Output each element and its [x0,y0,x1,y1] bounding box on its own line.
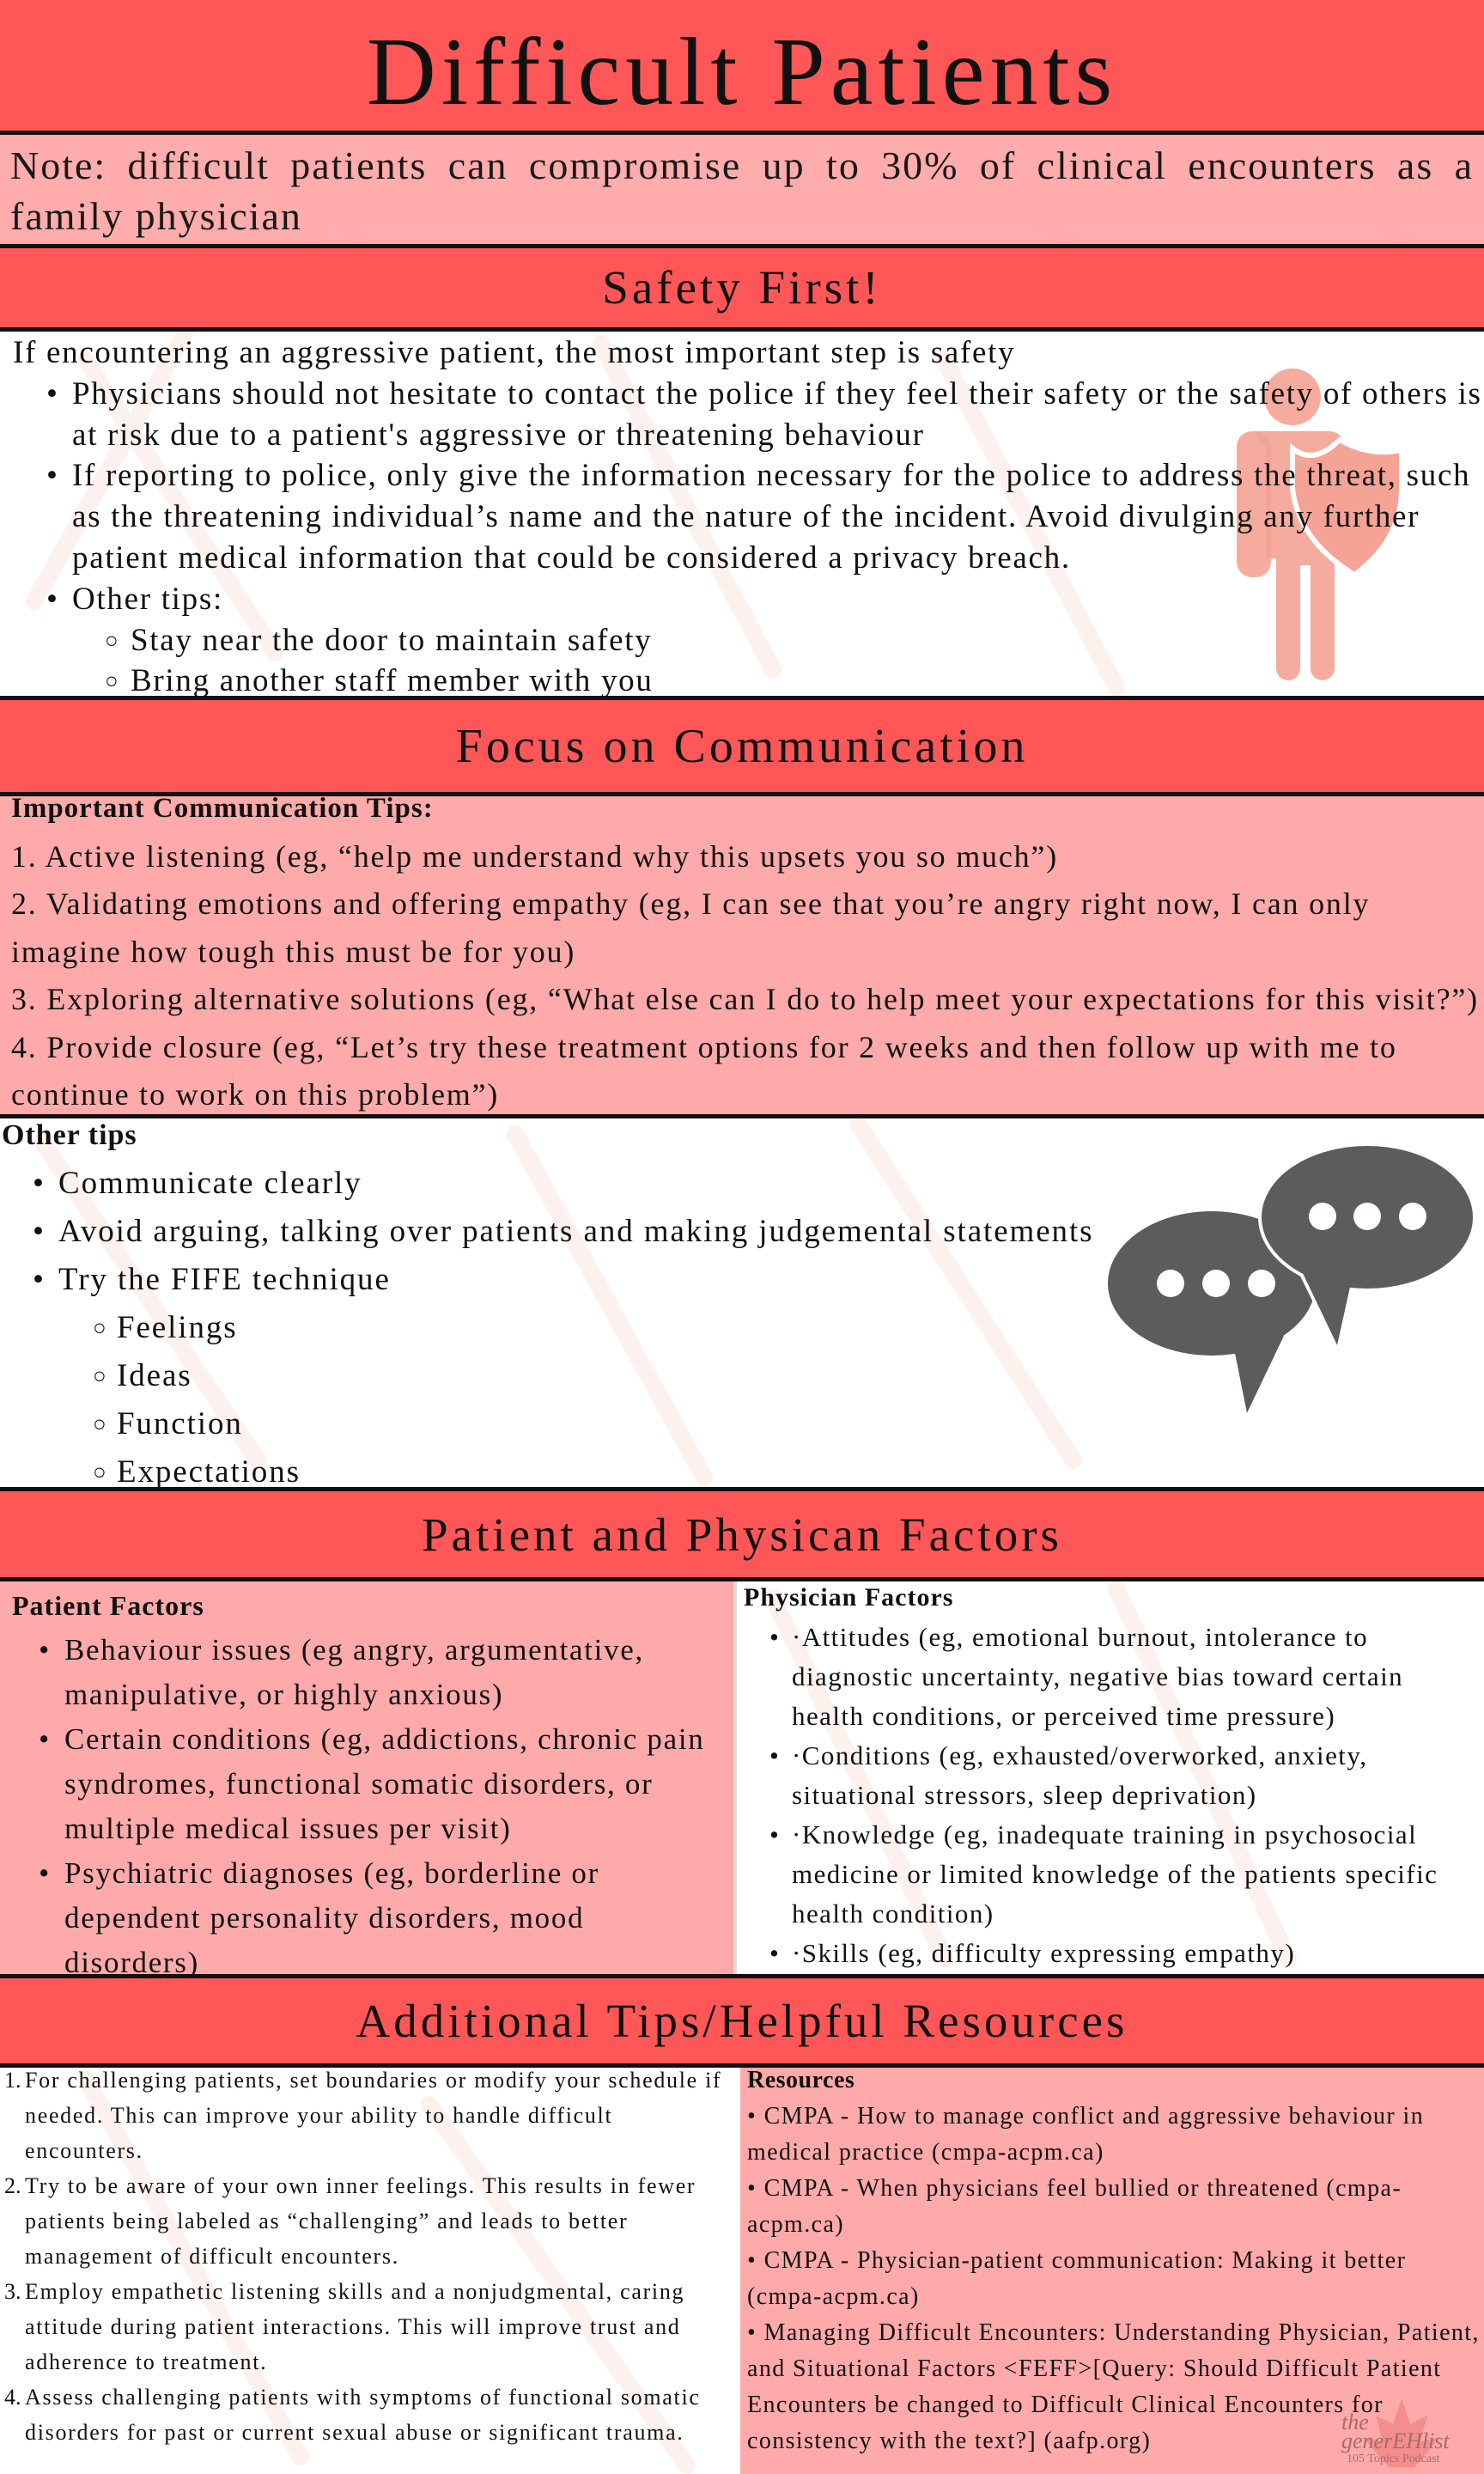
panel: patient factors: • [39,1722,51,1756]
other tips: • [33,1262,46,1297]
panel: additional tips list: Try to be aware of your own inner feelings. This results in fewer [25,2173,696,2198]
header: patient and physician factors: Patient and Physican Factors [422,1508,1062,1561]
title band [0,0,1484,132]
panel: additional tips list: adherence to treatment. [25,2349,267,2374]
panel: patient factors: Behaviour issues (eg angry, argumentative, [64,1633,644,1667]
other tips: Ideas [117,1358,192,1393]
panel: patient factors: dependent personality disorders, mood [64,1901,584,1935]
title: Difficult Patients [367,19,1117,125]
other tips: Communicate clearly [58,1166,362,1201]
panel: physician factors: ·Knowledge (eg, inadequate training in psychosocial [792,1819,1417,1849]
panel: resources [740,2068,1484,2474]
other tips [2,1119,1093,1490]
panel: physician factors [744,1583,1438,1968]
panel: patient factors: Patient Factors [12,1590,204,1621]
note text: family physician [10,194,302,238]
panel: additional tips list: For challenging patients, set boundaries or modify your schedule if [25,2068,721,2093]
note text: Note: difficult patients can compromise up to 30% of clinical encounters as a [10,143,1474,187]
panel: additional tips list [4,2068,721,2445]
safety content: Other tips: [72,582,223,617]
communication tips panel: continue to work on this problem”) [11,1077,499,1112]
panel: physician factors: ·Skills (eg, difficulty expressing empathy) [792,1938,1295,1968]
safety content: • [46,458,59,493]
other tips: • [33,1166,46,1201]
note text [10,143,1474,238]
panel: additional tips list: attitude during patient interactions. This will improve trust and [25,2314,681,2339]
panel: additional tips list: disorders for past or current sexual abuse or significant trauma. [25,2420,684,2445]
safety content: at risk due to a patient's aggressive or threatening behaviour [72,417,925,453]
safety content: Stay near the door to maintain safety [131,623,652,658]
panel: resources: • CMPA - When physicians feel bullied or threatened (cmpa- [747,2175,1402,2202]
other tips: Avoid arguing, talking over patients and making judgemental statements [58,1214,1093,1249]
panel: patient factors: disorders) [64,1946,199,1979]
panel: resources: Encounters be changed to Difficult Clinical Encounters for [747,2392,1384,2418]
panel: resources: and Situational Factors <FEFF>[Query: Should Difficult Patient [747,2355,1441,2382]
header: focus on communication: Focus on Communication [456,720,1028,773]
safety content: • [46,376,59,411]
panel: additional tips list: 2. [4,2173,21,2198]
panel: patient factors: manipulative, or highly anxious) [64,1678,503,1711]
panel: additional tips list: management of difficult encounters. [25,2244,399,2269]
other tips: • [33,1214,46,1249]
safety content: as the threatening individual’s name and the nature of the incident. Avoid divulging any further [72,499,1420,534]
panel: additional tips list: 3. [4,2279,21,2304]
communication tips panel: imagine how tough this must be for you) [11,935,575,969]
panel: physician factors: ·Conditions (eg, exhausted/overworked, anxiety, [792,1740,1367,1770]
header: patient and physician factors [0,1491,1484,1578]
icon: person with shield [1237,369,1399,680]
panel: additional tips list: Employ empathetic listening skills and a nonjudgmental, caring [25,2279,684,2304]
safety content: If reporting to police, only give the information necessary for the police to address the threat, such [72,458,1470,493]
icon: speech bubbles [1108,1146,1473,1413]
panel: resources: • CMPA - Physician-patient communication: Making it better [747,2247,1406,2274]
communication tips panel: 4. Provide closure (eg, “Let’s try these treatment options for 2 weeks and then follow up with me to [11,1029,1397,1063]
panel: physician factors: health conditions, or perceived time pressure) [792,1701,1335,1731]
panel: patient factors: • [39,1856,51,1890]
other tips: ○ [93,1315,108,1340]
communication tips panel: 1. Active listening (eg, “help me understand why this upsets you so much”) [11,838,1058,873]
communication tips panel: Important Communication Tips: [11,793,434,824]
panel: physician factors: • [769,1622,780,1652]
panel: patient factors: multiple medical issues per visit) [64,1812,512,1845]
panel: resources: • CMPA - How to manage conflict and aggressive behaviour in [747,2103,1424,2130]
other tips: ○ [93,1411,108,1436]
panel: additional tips list: 4. [4,2385,21,2410]
header: additional tips [0,1978,1484,2064]
logo: the generEHlist [1341,2398,1450,2467]
header: safety first: Safety First! [602,261,882,314]
safety content [13,335,1482,698]
other tips: ○ [93,1363,108,1388]
panel: additional tips list: patients being labeled as “challenging” and leads to better [25,2209,628,2233]
other tips: Function [117,1406,243,1441]
panel: resources: Resources [747,2067,855,2093]
panel: resources: medical practice (cmpa-acpm.ca) [747,2139,1104,2166]
panel: additional tips list: Assess challenging patients with symptoms of functional somatic [25,2385,701,2410]
safety content: patient medical information that could be considered a privacy breach. [72,540,1071,576]
panel: physician factors: Physician Factors [744,1583,953,1612]
header: safety first [0,248,1484,327]
panel: physician factors: health condition) [792,1898,994,1929]
panel: patient factors [0,1581,733,1976]
panel: physician factors: • [769,1819,780,1849]
safety content: If encountering an aggressive patient, the most important step is safety [13,335,1015,370]
other tips: Try the FIFE technique [58,1262,391,1297]
panel: physician factors: situational stressors, sleep deprivation) [792,1780,1257,1810]
panel: resources: (cmpa-acpm.ca) [747,2283,920,2310]
safety content: ○ [105,668,119,693]
panel: additional tips list: needed. This can improve your ability to handle difficult [25,2103,612,2128]
logo: the generEHlist: 105 Topics Podcast [1347,2453,1439,2465]
note band [0,135,1484,245]
panel: patient factors: • [39,1633,51,1667]
panel: patient factors: Psychiatric diagnoses (eg, borderline or [64,1856,599,1890]
panel: resources: consistency with the text?] (aafp.org) [747,2428,1151,2454]
safety content: ○ [105,628,119,653]
panel: additional tips list: 1. [4,2068,21,2093]
panel: physician factors: • [769,1938,780,1968]
panel: additional tips list: encounters. [25,2138,143,2163]
panel: physician factors: • [769,1740,780,1770]
panel: physician factors: medicine or limited knowledge of the patients specific [792,1859,1438,1889]
communication tips panel: 3. Exploring alternative solutions (eg, “What else can I do to help meet your expectations for this visit?”) [11,982,1479,1016]
other tips: Feelings [117,1310,238,1345]
safety content: Physicians should not hesitate to contact the police if they feel their safety or the safety of others is [72,376,1482,411]
other tips: Expectations [117,1454,301,1490]
header: additional tips: Additional Tips/Helpful Resources [356,1995,1128,2047]
safety content: Bring another staff member with you [131,663,654,698]
communication tips panel: 2. Validating emotions and offering empathy (eg, I can see that you’re angry right now, I can only [11,887,1370,921]
other tips: Other tips [2,1119,137,1151]
panel: physician factors: diagnostic uncertainty, negative bias toward certain [792,1661,1403,1691]
other tips: ○ [93,1459,108,1484]
safety content: • [46,582,59,617]
logo: the generEHlist: generEHlist [1341,2428,1450,2453]
communication tips panel [0,796,1484,1115]
logo: the generEHlist: the [1341,2410,1369,2434]
panel: resources: • Managing Difficult Encounters: Understanding Physician, Patient, [747,2319,1480,2346]
panel: resources: acpm.ca) [747,2211,844,2238]
panel: patient factors: syndromes, functional somatic disorders, or [64,1767,653,1801]
header: focus on communication [0,700,1484,793]
panel: patient factors: Certain conditions (eg, addictions, chronic pain [64,1722,704,1756]
panel: physician factors: ·Attitudes (eg, emotional burnout, intolerance to [792,1622,1368,1652]
